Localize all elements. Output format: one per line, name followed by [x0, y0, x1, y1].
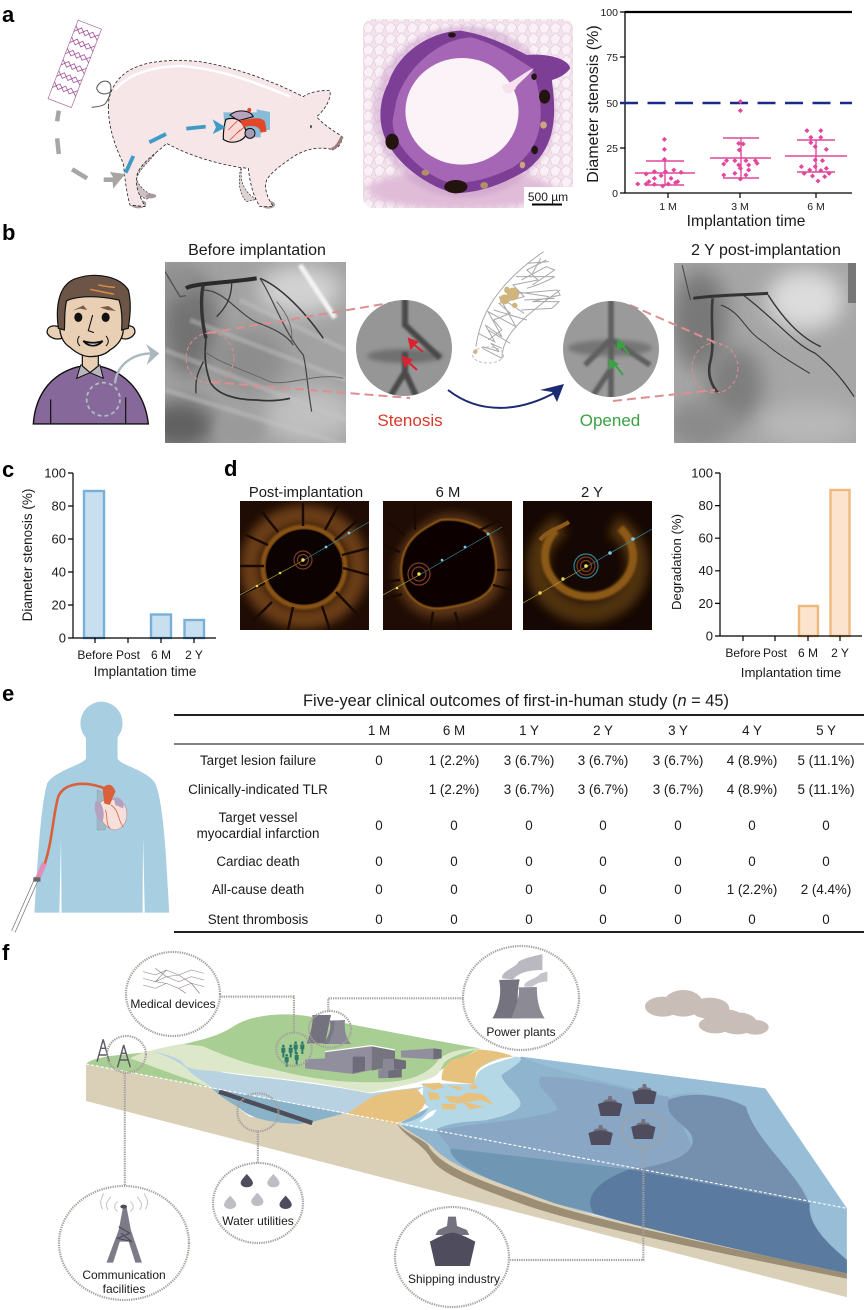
table: clinical outcomes: 1 M — [368, 723, 390, 738]
white shoreline — [420, 1057, 513, 1122]
green hill — [86, 1014, 480, 1088]
chart: diameter stenosis scatter: 6 M — [807, 201, 825, 213]
sand patches — [347, 1049, 513, 1124]
bar chart: diameter stenosis: 40 — [52, 564, 66, 580]
panel f: applications landscape — [2, 940, 847, 1307]
sea surface and depth layers — [399, 1057, 847, 1273]
dashed surface edge — [86, 1064, 847, 1208]
illustration: overlays, towers, clouds, ships, connectors — [86, 990, 847, 1260]
bar chart: degradation: 100 — [691, 466, 713, 480]
icon: cooling towers — [307, 1015, 351, 1044]
table: clinical outcomes: 6 M — [443, 723, 465, 738]
table: clinical outcomes: 3 (6.7%) — [578, 782, 628, 797]
bar chart: degradation: Implantation time — [741, 665, 841, 680]
table: clinical outcomes: 0 — [822, 854, 830, 869]
table: clinical outcomes: 0 — [375, 753, 383, 768]
bar chart: degradation: 40 — [699, 563, 713, 578]
panel letter d: d — [224, 456, 237, 481]
panel b: patient angiography — [2, 220, 860, 450]
callout: power plants: Power plants — [486, 1025, 556, 1039]
table: clinical outcomes: 1 (2.2%) — [429, 753, 479, 768]
bar chart: diameter stenosis: 20 — [52, 598, 66, 612]
illustration: human silhouette with catheter — [13, 702, 169, 932]
table: clinical outcomes: 5 (11.1%) — [797, 782, 855, 797]
table: clinical outcomes: 0 — [525, 818, 533, 833]
callout: water utilities: Water utilities — [222, 1214, 294, 1228]
image: angiogram at 2 years — [674, 263, 856, 443]
river channel — [153, 1052, 424, 1113]
chart: diameter stenosis scatter — [585, 7, 852, 230]
arrow: blue catheter path — [126, 119, 226, 173]
panel letter b: b — [2, 220, 15, 245]
table: clinical outcomes: Clinically-indicated TLR — [188, 782, 328, 797]
panel letter a: a — [2, 2, 15, 27]
table: clinical outcomes: All-cause death — [212, 882, 304, 897]
table: clinical outcomes: 3 (6.7%) — [578, 753, 628, 768]
image: OCT 6 months — [383, 501, 512, 630]
illustration: coast detail, sand and industry — [281, 1015, 521, 1132]
panel d: OCT imaging and degradation — [224, 456, 862, 680]
table: clinical outcomes: 0 — [599, 854, 607, 869]
callout: shipping industry: Shipping industry — [408, 1272, 500, 1286]
table: clinical outcomes: 0 — [599, 818, 607, 833]
chart: diameter stenosis scatter: 3 M — [731, 201, 749, 213]
connector lines and small markers — [107, 997, 664, 1260]
table: clinical outcomes: 0 — [822, 912, 830, 927]
table: clinical outcomes: 0 — [450, 818, 458, 833]
image: angiogram before implantation — [165, 262, 346, 443]
arrow: stenosis to opened — [448, 384, 564, 408]
table: clinical outcomes: 4 (8.9%) — [727, 782, 777, 797]
table: clinical outcomes: 1 (2.2%) — [429, 782, 479, 797]
catheter — [44, 784, 105, 865]
river banks — [130, 1044, 481, 1093]
table: clinical outcomes: 0 — [525, 882, 533, 897]
panel a: preclinical pig study — [2, 2, 852, 230]
table: clinical outcomes: 0 — [450, 854, 458, 869]
icon: stent — [48, 20, 101, 108]
bar chart: diameter stenosis: 0 — [59, 630, 66, 646]
callout: communication facilities: facilities — [103, 1282, 145, 1296]
callout: medical devices — [126, 952, 220, 1036]
bar chart: diameter stenosis: 6 M — [151, 648, 171, 662]
bar chart: degradation: 2 Y — [831, 646, 849, 660]
panel letter f: f — [2, 940, 10, 965]
image: histology cross-section — [363, 19, 573, 210]
chart: diameter stenosis scatter: 75 — [606, 52, 618, 64]
bar chart: diameter stenosis: 60 — [52, 532, 66, 546]
table: clinical outcomes: Stent thrombosis — [208, 912, 309, 927]
chart: diameter stenosis scatter: 1 M — [659, 201, 677, 213]
icon: heart in chest — [95, 785, 127, 830]
bar chart: diameter stenosis: 100 — [44, 466, 66, 480]
image: OCT 2 years — [523, 501, 652, 630]
table: clinical outcomes: 0 — [375, 882, 383, 897]
bar chart: degradation: 80 — [699, 498, 713, 513]
bar chart: diameter stenosis: Before — [77, 648, 113, 662]
seabed strip — [397, 1123, 847, 1279]
bar chart: degradation: Degradation (%) — [669, 514, 684, 610]
table: clinical outcomes: 0 — [674, 912, 682, 927]
table: clinical outcomes: 0 — [375, 854, 383, 869]
chart: diameter stenosis scatter: Implantation time — [687, 213, 805, 230]
sea ships — [598, 1096, 622, 1116]
bar chart: degradation: 20 — [699, 596, 713, 611]
table: clinical outcomes: 0 — [674, 818, 682, 833]
table: clinical outcomes: 0 — [674, 882, 682, 897]
table: clinical outcomes: 0 — [375, 818, 383, 833]
table: clinical outcomes: 3 (6.7%) — [653, 782, 703, 797]
table: clinical outcomes: 5 Y — [816, 723, 836, 738]
icon: people — [281, 1041, 304, 1067]
arrow: patient to angiogram — [115, 344, 159, 383]
table: clinical outcomes: 0 — [748, 854, 756, 869]
table: clinical outcomes: Target vessel — [219, 810, 297, 825]
pit water and pipeline — [212, 1088, 344, 1124]
bar chart: diameter stenosis: 80 — [52, 498, 66, 514]
bar chart: diameter stenosis — [20, 466, 216, 679]
scale bar: 500 µm: 500 µm — [528, 190, 568, 204]
bar chart: degradation: 60 — [699, 530, 713, 546]
table: clinical outcomes: 0 — [599, 882, 607, 897]
callout lines: pink dashed zoom connectors — [186, 301, 738, 401]
illustration: terrain block with land and sea — [86, 1014, 847, 1297]
bar chart: diameter stenosis: Diameter stenosis (%) — [20, 489, 35, 621]
icon: heart in pig — [223, 108, 270, 142]
callout: shipping industry — [395, 1207, 509, 1307]
icon: patient cartoon — [33, 275, 159, 424]
table: clinical outcomes: myocardial infarction — [197, 826, 319, 841]
table: clinical outcomes: 0 — [375, 912, 383, 927]
table: clinical outcomes: 5 (11.1%) — [797, 753, 855, 768]
table: clinical outcomes: 2 (4.4%) — [801, 882, 851, 897]
table: clinical outcomes: Target lesion failure — [200, 753, 316, 768]
table: clinical outcomes: 4 Y — [742, 723, 762, 738]
heading: Post-implantation: Post-implantation — [249, 485, 363, 501]
table: clinical outcomes: 2 Y — [593, 723, 613, 738]
image: opened magnified circle — [563, 301, 659, 397]
table: clinical outcomes: 1 Y — [519, 723, 539, 738]
callout: communication facilities — [59, 1186, 189, 1300]
bar chart: degradation: Before — [725, 646, 761, 660]
table: clinical outcomes: 1 (2.2%) — [727, 882, 777, 897]
icon: land towers — [97, 1039, 130, 1067]
panel letter e: e — [2, 681, 14, 706]
bar chart: diameter stenosis: Implantation time — [94, 664, 196, 679]
arrows: green opened markers — [610, 340, 629, 375]
panel letter c: c — [2, 457, 14, 482]
bar chart: degradation: 6 M — [798, 646, 818, 660]
table: clinical outcomes — [174, 715, 864, 932]
heading: 6 M: 6 M — [436, 485, 460, 501]
callout: medical devices: Medical devices — [130, 997, 216, 1011]
table: clinical outcomes: 3 (6.7%) — [504, 782, 554, 797]
illustration: pig with heart and delivery arrows — [92, 60, 342, 209]
table: clinical outcomes: 0 — [822, 818, 830, 833]
illustration: bent stent with degrading struts — [473, 252, 560, 363]
callout: communication facilities: Communication — [82, 1268, 166, 1282]
table: clinical outcomes: 0 — [450, 912, 458, 927]
panel c: diameter stenosis bars — [2, 457, 216, 679]
table: clinical outcomes: 4 (8.9%) — [727, 753, 777, 768]
chart: diameter stenosis scatter: 100 — [600, 7, 618, 19]
bar chart: diameter stenosis: Post — [116, 648, 141, 662]
icon: factory buildings — [305, 1046, 442, 1078]
table: clinical outcomes: 3 (6.7%) — [504, 753, 554, 768]
chart: diameter stenosis scatter: 50 — [606, 98, 618, 110]
table: clinical outcomes: 0 — [525, 912, 533, 927]
panel e: first-in-human outcomes — [2, 681, 864, 932]
label: Opened: Opened — [580, 411, 640, 430]
bar chart: degradation: 0 — [706, 628, 713, 644]
table: clinical outcomes: 0 — [450, 882, 458, 897]
chart: diameter stenosis scatter: 0 — [612, 188, 618, 200]
callout: power plants — [463, 946, 579, 1050]
near-shore water — [397, 1057, 521, 1132]
label: Stenosis: Stenosis — [377, 411, 443, 430]
table: clinical outcomes: 0 — [748, 818, 756, 833]
bar chart: diameter stenosis: 2 Y — [185, 648, 203, 662]
heading: before implantation: Before implantation — [188, 242, 326, 259]
table: clinical outcomes: 0 — [525, 854, 533, 869]
bar chart: degradation — [669, 466, 862, 680]
table: clinical outcomes: 3 Y — [668, 723, 688, 738]
scale bar: 500 µm — [524, 187, 573, 208]
table: clinical outcomes: 3 (6.7%) — [653, 753, 703, 768]
chart: diameter stenosis scatter: 25 — [606, 143, 618, 155]
soil cross-section — [86, 1064, 847, 1297]
table title: Five-year clinical outcomes of first-in-human study (n = 45) — [303, 692, 729, 710]
table: clinical outcomes: 0 — [674, 854, 682, 869]
table: clinical outcomes: 0 — [748, 912, 756, 927]
callout: water utilities — [213, 1163, 303, 1243]
bar chart: degradation: Post — [763, 646, 788, 660]
heading: 2 Y post-implantation: 2 Y post-implantation — [691, 242, 841, 259]
table: clinical outcomes: 0 — [599, 912, 607, 927]
chart: diameter stenosis scatter: Diameter stenosis (%) — [585, 25, 602, 183]
image: stenosis magnified circle — [355, 298, 453, 400]
arrows: red stenosis markers — [403, 339, 423, 370]
table: clinical outcomes: Cardiac death — [216, 854, 300, 869]
tail — [92, 81, 111, 107]
clouds — [645, 990, 769, 1035]
arrow: grey dashed route — [57, 111, 125, 189]
image: OCT post-implantation — [240, 501, 369, 630]
heading: 2 Y: 2 Y — [581, 485, 603, 501]
